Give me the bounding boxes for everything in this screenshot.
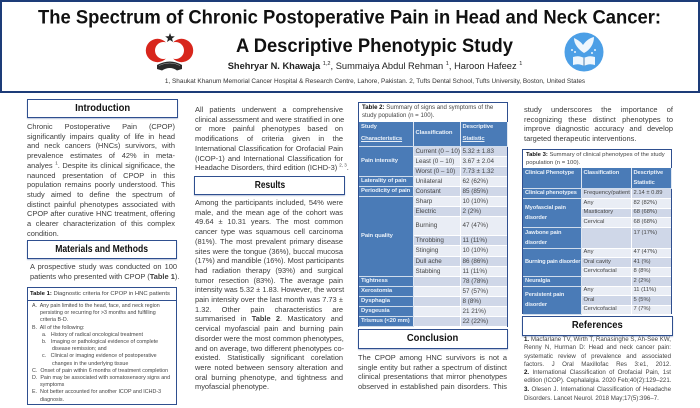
table 3 data: Descriptive <box>634 170 663 176</box>
table 3 data: 2.14 ± 0.89 <box>634 190 662 196</box>
text block: results: 1.32. Other pain characteristics are <box>195 305 343 314</box>
text block: conclusion continued: recognizing these distinct phenotypes to <box>524 115 673 124</box>
text block: methods continued: International Classification for Orofacial Pain <box>195 144 343 153</box>
text block: introduction: population remains poorly understood. This <box>27 180 175 189</box>
text block: references: 3. Olesen J. International Classification of Headache <box>524 386 671 393</box>
text block: results: myofascial phenotype. <box>195 382 269 391</box>
text block: methods continued: clinical assessment and were stratified in one <box>195 115 344 124</box>
text block: references: Renny N, Hurman D: Head and neck cancer pain: <box>524 344 671 351</box>
table 2 data: Xerostomia <box>361 288 392 294</box>
table 2 data: 21 21%) <box>462 308 486 315</box>
text block: references: 2. International Classification of Orofacial Pain, 1st <box>524 369 671 376</box>
text block: results: (17%) and mandible (16%). Most participants <box>195 256 344 265</box>
table 3 data: Masticatory <box>584 209 613 215</box>
heading: References <box>522 316 673 336</box>
text block: results: 49.64 ± 10.31 years. The most common <box>195 217 343 226</box>
table 2 data: 10 (10%) <box>462 198 488 204</box>
text block: conclusion: observed in established pain disorders. This <box>358 382 507 391</box>
table 1 criteria list: c. Clinical or imaging evidence of postoperative <box>42 353 157 359</box>
text block: methods continued: modifications of criteria given in the <box>195 134 343 143</box>
heading: Results <box>194 176 345 195</box>
table 3 caption: Table 3: Summary of clinical phenotypes of the study population (n = 100). <box>526 152 665 166</box>
table 3 data: Burning pain disorder <box>525 259 580 265</box>
table 3 data: 47 (47%) <box>634 249 657 255</box>
text block: results: pain intensity over the last month was 7.73 ± <box>195 295 343 304</box>
text block: references: Disorders. Lancet Neurol. 2018 May;17(5):396–7. <box>524 395 659 402</box>
text block: results: had radiation therapy (93%) and surgical <box>195 266 343 275</box>
table 1 criteria list <box>32 303 170 403</box>
text block: introduction: prevalence estimates of 42% in meta- <box>27 151 175 160</box>
text block: methods continued: All patients underwent a comprehensive <box>195 105 343 114</box>
table 2 data: Unilateral <box>416 178 442 184</box>
text block: results: summarised in Table 2. Masticatory and <box>195 314 343 323</box>
table 1 criteria list: criteria B-D. <box>40 317 68 323</box>
table 1 criteria list: B. All of the following: <box>32 325 84 331</box>
table 3 data: 17 (17%) <box>634 230 657 236</box>
table 1 criteria list: symptoms <box>40 382 64 388</box>
authors: Shehryar N. Khawaja 1,2, Summaiya Abdul Rehman 1, Haroon Hafeez 1 <box>228 61 522 71</box>
text block: methods intro: A prospective study was conducted on 100 <box>30 262 177 271</box>
heading: Conclusion <box>358 329 508 348</box>
table 3 data: Frequency/patient <box>584 190 630 196</box>
table 3 data: Clinical phenotypes <box>525 190 577 196</box>
table 2 data: Tightness <box>361 278 388 284</box>
heading: Materials and Methods: Materials and Methods <box>56 243 148 255</box>
text block: references: systematic review of prevalence and associated <box>524 353 671 360</box>
table 1 criteria list: D. Pain may be associated with somatosensory signs and <box>32 375 170 381</box>
table 3 data <box>523 168 672 315</box>
table 2 data: Constant <box>416 188 441 194</box>
table 3: clinical phenotypes <box>522 149 672 314</box>
table 3 data: Neuralgia <box>525 278 550 284</box>
text block: introduction: CPOP after curative HNC treatment, offering <box>27 209 175 218</box>
text block: conclusion continued: improve diagnostic accuracy and develop <box>524 124 673 133</box>
heading: Conclusion: Conclusion <box>407 332 459 344</box>
table 3 data: 82 (82%) <box>634 200 657 206</box>
text block: references: 1. Macfarlane TV, Wirth T, Ranasinghe S, Ah-See KW, <box>524 336 671 343</box>
text block: methods intro <box>30 262 179 281</box>
table 1 criteria list: diagnosis. <box>40 397 64 403</box>
icon: Shaukat Khanum hospital logo <box>146 33 194 70</box>
table 3 data: disorder <box>525 215 547 221</box>
text block: introduction: study aimed to define the spectrum of <box>27 190 175 199</box>
table 2 data: Burning <box>416 222 437 229</box>
text block: conclusion: The CPOP among HNC survivors is not a <box>358 353 507 362</box>
heading: Introduction <box>27 99 178 118</box>
table 1 caption: Table 1: Diagnostic criteria for CPOP in HNC patients <box>30 291 170 297</box>
table 2 data: Current (0 – 10) <box>416 148 460 154</box>
table 3 data: Statistic <box>634 180 655 186</box>
text block: methods continued: Headache Disorders, third edition (ICHD-3) 2, 3. <box>195 163 349 172</box>
text block: introduction: a clearer characterization of this complex <box>27 219 175 228</box>
table 3 data: Persistent pain <box>525 292 564 298</box>
text block: conclusion <box>358 353 507 391</box>
table 2 data: 10 (10%) <box>462 247 488 254</box>
table 3 data: Any <box>584 287 594 293</box>
text block: introduction: analyes 1. Despite its clinical significace, the <box>27 160 175 170</box>
table 2 data: 3.67 ± 2.04 <box>462 158 494 164</box>
table 1 criteria list: A. Any pain limited to the head, face, and neck region <box>32 303 160 309</box>
table 1 criteria list: changes in the underlying tissue <box>52 361 128 367</box>
heading: References: References <box>572 319 623 331</box>
table 2 data: 62 (62%) <box>462 178 488 184</box>
text block: results: intensity was 5.32 ± 1.83. However, the worst <box>195 285 344 294</box>
table 3 data: Cervicofacial <box>584 268 617 274</box>
title: The Spectrum of Chronic Postoperative Pain in Head and Neck Cancer: <box>38 6 661 28</box>
text block: results: were noted between sensory alteration and <box>195 363 343 372</box>
affiliations: 1, Shaukat Khanum Memorial Cancer Hospital & Research Centre, Lahore, Pakistan. 2, Tufts Dental School, Tufts University, Boston, United States <box>165 78 585 85</box>
table 2 data: Pain intensity <box>361 158 398 164</box>
table 2 data: Characteristics <box>361 136 402 142</box>
table 2 data: Descriptive <box>462 124 493 130</box>
table 3 data: 68 (68%) <box>634 219 657 225</box>
text block: references <box>524 336 671 402</box>
text block: conclusion continued: targeted therapeutic interventions. <box>524 134 636 143</box>
table 1 criteria list: b. Imaging or pathological evidence of complete <box>42 339 158 345</box>
table 2 data: 57 (57%) <box>462 288 488 295</box>
table 3 data: Any <box>584 200 594 206</box>
table 3 data: disorder <box>525 302 547 308</box>
text block: results: existed. Statistically significant corelation <box>195 353 343 362</box>
table 3 data: Jawbone pain <box>525 230 561 236</box>
table 1 criteria list: a. History of radical oncological treatment <box>42 332 143 338</box>
table 3 data: Myofascial pain <box>525 205 566 211</box>
table 2 data: Laterality of pain <box>361 178 406 184</box>
table 3 data: 68 (68%) <box>634 209 657 215</box>
text block: methods intro: patients who presented with CPOP (Table 1). <box>30 272 179 281</box>
text block: results: male, and the mean age of the cohort was <box>195 208 343 217</box>
table 3 data: Classification <box>584 170 619 176</box>
table 2 caption: Table 2: Summary of signs and symptoms of the study population (n = 100). <box>362 104 493 119</box>
text block: results: disorder were the most common phenotypes, <box>195 334 344 343</box>
table 1 caption <box>28 288 176 301</box>
text block: methods continued: (ICOP-1) and International Classification for <box>195 154 343 163</box>
table 2 data: 11 (11%) <box>462 268 487 274</box>
table 2 data: 78 (78%) <box>462 278 488 285</box>
table 3 data: Oral cavity <box>584 259 611 265</box>
text block: introduction: distinct painful phenotypes associated with <box>27 200 175 209</box>
table 2 data: Statistic <box>462 136 485 142</box>
table 2 data: Dull ache <box>416 258 442 264</box>
text block: results <box>195 198 344 391</box>
table 2 data: 7.73 ± 1.32 <box>462 168 494 174</box>
table 2 data: Dysgeusia <box>361 308 390 314</box>
table 2 data: Study <box>361 124 377 130</box>
text block: introduction <box>27 122 175 238</box>
heading: Results: Results <box>254 179 285 191</box>
table 2 data <box>359 122 508 327</box>
table 1 criteria list: persisting or recurring for >3 months and fulfilling <box>40 310 156 316</box>
table 1 criteria list: disease remission; and <box>52 346 107 352</box>
text block: results: and on average, two different phenotypes co- <box>195 344 344 353</box>
table 2 data: Electric <box>416 208 436 214</box>
title <box>38 6 661 57</box>
table 3 data: Cervicofacial <box>584 306 617 312</box>
table 2 data: Periodicity of pain <box>361 188 410 194</box>
table 1 criteria list: E. Not better accounted for another ICOP and ICHD-3 <box>32 389 161 395</box>
table 2 data: 11 (11%) <box>462 236 487 244</box>
text block: conclusion: clinical presentations that mirror phenotypes <box>358 372 507 381</box>
text block: introduction: significantly impairs quality of life in head <box>27 132 175 141</box>
text block: results: Among the participants included, 54% were <box>195 198 343 207</box>
text block: methods continued: or more painful phenotypes based on <box>195 124 343 133</box>
icon: university dove and book logo <box>564 32 604 72</box>
table 1 criteria list: C. Onset of pain within 6 months of treatment completion <box>32 368 168 374</box>
table 2 data: Stinging <box>416 247 438 254</box>
table 3 data: Cervical <box>584 219 604 225</box>
table 3 data: 11 (11%) <box>634 287 656 293</box>
table 2 data: 2 (2%) <box>462 208 481 214</box>
table 2 data: Sharp <box>416 198 432 204</box>
table 2 data: 85 (85%) <box>462 188 488 194</box>
text block: references: edition (ICOP). Cephalalgia. 2020 Feb;40(2):129–221. <box>524 377 671 384</box>
text block: conclusion continued <box>524 105 673 143</box>
text block: introduction: condition. <box>27 229 59 238</box>
table 2 data: Least (0 – 10) <box>416 158 454 164</box>
table 2 data: Dysphagia <box>361 298 390 304</box>
table 3 data: 2 (2%) <box>634 278 651 284</box>
table 3 data: disorder <box>525 240 547 246</box>
title: A Descriptive Phenotypic Study <box>236 35 513 57</box>
table 2 data: 22 (22%) <box>462 318 488 325</box>
table 3 data: Oral <box>584 297 594 303</box>
table 3 data: 5 (5%) <box>634 297 651 303</box>
text block: results: cancer type was squamous cell carcinoma <box>195 227 343 236</box>
text block: results: (81%). The most prevalent primary disease <box>195 237 343 246</box>
text block: results: oral burning phenotype, and tightness and <box>195 373 343 382</box>
table 2 data: 86 (86%) <box>462 258 488 264</box>
text block: results: sites were the tongue (36%), buccal mucosa <box>195 247 343 256</box>
table 3 data: 41 (%) <box>634 259 651 265</box>
table 2 data: 8 (8%) <box>462 298 481 305</box>
table 2 data: 47 (47%) <box>462 222 488 229</box>
table 3 data: 8 (8%) <box>634 268 651 274</box>
table 2 data: Trismus (<20 mm) <box>361 318 410 324</box>
text block: conclusion: single entity but rather a spectrum of distinct <box>358 363 507 372</box>
text block: methods continued <box>195 105 349 172</box>
table 2 data: Stabbing <box>416 268 440 274</box>
table 3 data: Clinical Phenotype <box>525 170 574 176</box>
table 2 data: 5.32 ± 1.83 <box>462 148 494 154</box>
text block: introduction: and neck cancers (HNCs) survivors, with <box>27 141 175 150</box>
table 3 data: 7 (7%) <box>634 306 651 312</box>
table 2 data: Throbbing <box>416 236 444 244</box>
text block: introduction: Chronic Postoperative Pain (CPOP) <box>27 122 175 131</box>
text block: results: cervical myofascial pain and burning pain <box>195 324 343 333</box>
heading: Introduction: Introduction <box>75 102 130 114</box>
table 2 data: Pain quality <box>361 232 393 238</box>
table 3 data: Any <box>584 249 594 255</box>
text block: results: tumor resection (83%). The average pain <box>195 276 343 285</box>
heading: Materials and Methods <box>27 240 177 259</box>
text block: conclusion continued: study underscores the importance of <box>524 105 673 114</box>
table 2 data: Classification <box>416 130 452 136</box>
table 1: diagnostic criteria <box>27 287 177 405</box>
header banner <box>0 0 700 93</box>
text block: references: factors. J Oral Maxillofac Res 3:e1, 2012. <box>524 361 671 368</box>
text block: introduction: naunced presentation of CPOP in this <box>27 171 175 180</box>
table 2: signs and symptoms <box>358 102 508 327</box>
table 2 data: Worst (0 – 10) <box>416 168 455 174</box>
